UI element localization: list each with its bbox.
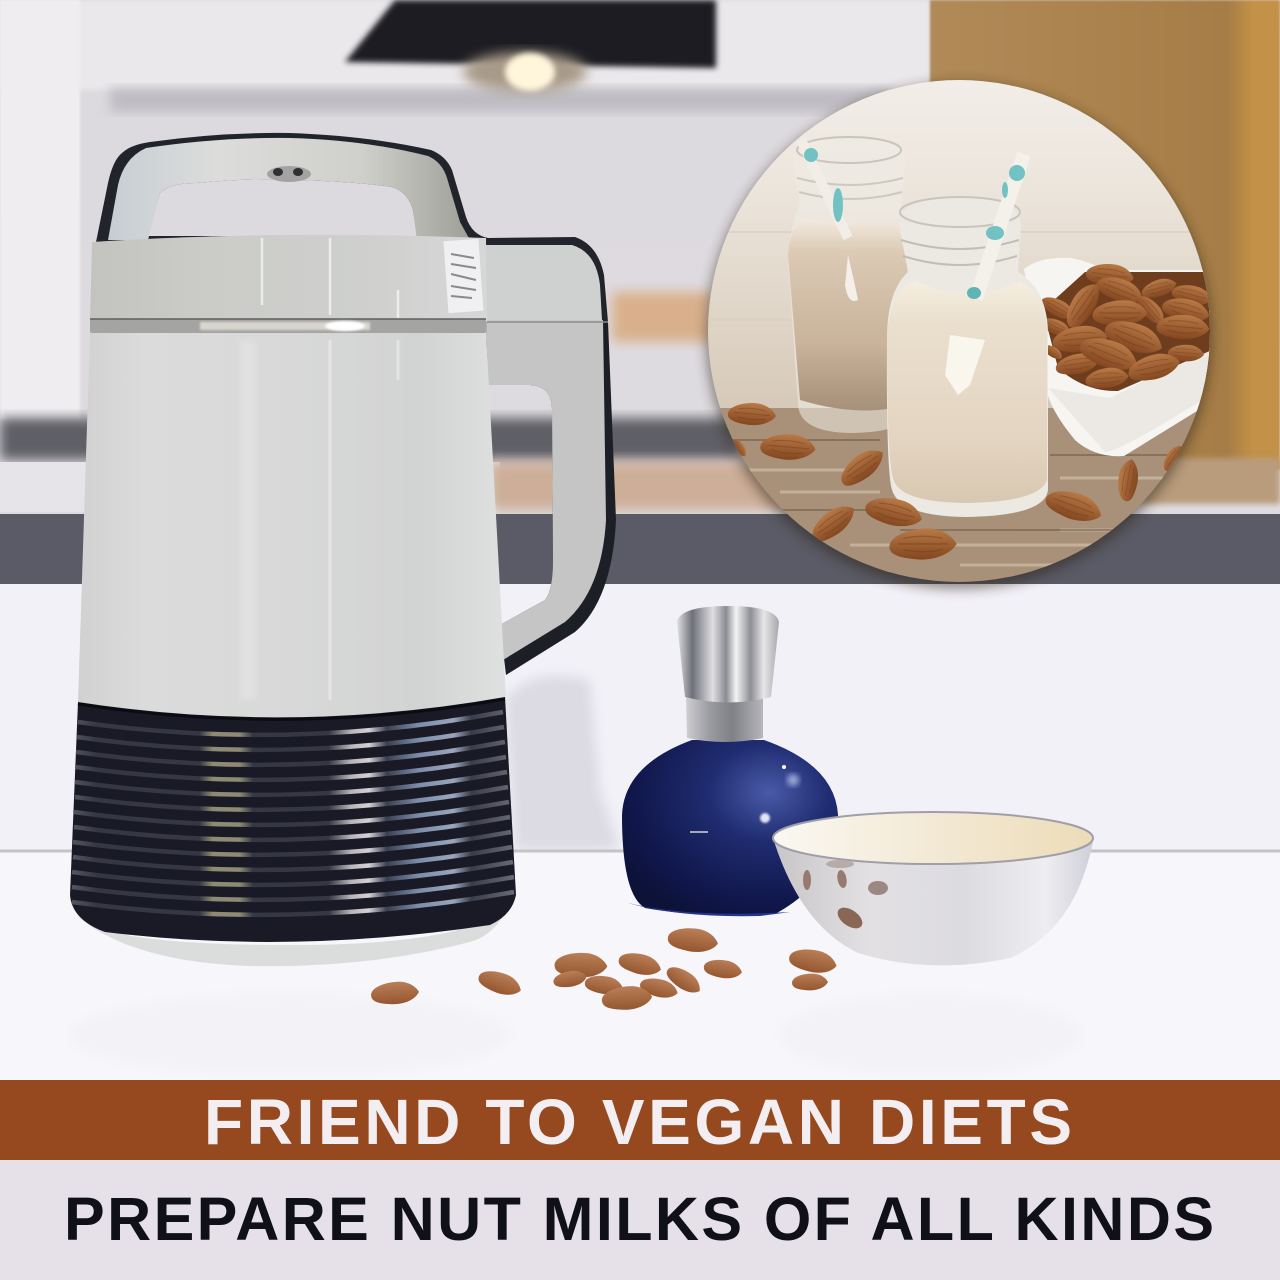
silver bowl [773, 812, 1093, 965]
lamp crown [677, 606, 779, 702]
inset photo: almond milk bottles [700, 70, 1220, 590]
lamp bottle [622, 606, 838, 916]
main body [78, 333, 506, 718]
almonds on table [370, 925, 839, 1011]
chrome band [90, 319, 486, 333]
steam vents [267, 166, 311, 182]
lid [90, 235, 487, 322]
lamp collar [686, 695, 763, 742]
front bottle [887, 154, 1048, 517]
table surface [0, 851, 1280, 1080]
banner: friend to vegan diets [0, 1080, 1280, 1160]
back bottle [788, 136, 908, 433]
straw [801, 140, 848, 238]
side handle [486, 245, 616, 675]
lid label [443, 239, 483, 313]
scattered almonds [728, 403, 776, 426]
subtitle panel [0, 1160, 1280, 1280]
white foot [76, 905, 510, 966]
ribbed base [70, 697, 516, 942]
straw [976, 154, 1024, 298]
subtitle text: PREPARE NUT MILKS OF ALL KINDS [64, 1185, 1214, 1253]
soymilk maker appliance [70, 133, 616, 966]
banner heading: FRIEND TO VEGAN DIETS [204, 1086, 1072, 1158]
top handle [96, 133, 608, 322]
heart-shaped bowl of almonds [1024, 258, 1215, 456]
